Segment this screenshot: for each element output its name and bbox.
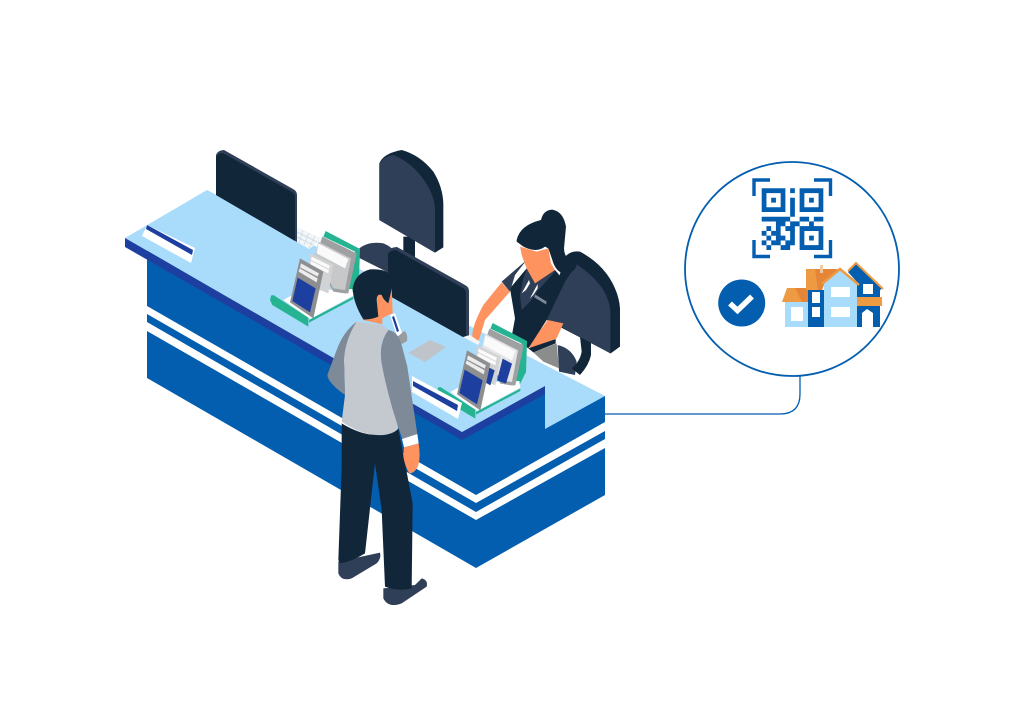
arm left (472, 282, 510, 340)
back arm (327, 322, 357, 395)
counter (125, 190, 605, 568)
keyboard small (463, 335, 480, 345)
trousers (338, 423, 413, 590)
icon: house (782, 263, 883, 327)
counter top (125, 190, 605, 432)
icon: QR code (754, 180, 830, 256)
keyboard (297, 227, 323, 249)
lapels (522, 280, 530, 293)
sleeve (502, 260, 527, 292)
customer (327, 269, 427, 605)
monitor left (216, 150, 297, 242)
collar (520, 267, 555, 310)
face (520, 247, 555, 283)
paper slip (408, 340, 446, 362)
hand (403, 443, 420, 473)
document tray right (437, 323, 527, 419)
belt (528, 339, 556, 352)
hair (517, 210, 577, 273)
back chair (353, 150, 443, 273)
shoes (338, 553, 380, 579)
arm right (527, 320, 563, 348)
name plate right (412, 376, 462, 419)
circle callout: QR and property (685, 162, 899, 376)
receptionist chair (547, 251, 620, 375)
name plate left (142, 225, 195, 263)
monitor centre (388, 247, 469, 337)
neck and face (363, 285, 393, 324)
receptionist (472, 210, 577, 368)
counter body (147, 250, 605, 568)
cuff (402, 434, 419, 447)
torso (510, 268, 565, 348)
hair (353, 269, 393, 319)
trousers (533, 343, 559, 368)
document tray left (270, 231, 360, 327)
counter stripes (147, 306, 605, 520)
front arm (381, 330, 417, 439)
counter edge (125, 238, 545, 440)
icon: check mark badge (718, 280, 765, 326)
pen holder (390, 313, 407, 344)
name badge (534, 294, 547, 304)
connector line (605, 376, 800, 414)
torso (342, 322, 398, 435)
